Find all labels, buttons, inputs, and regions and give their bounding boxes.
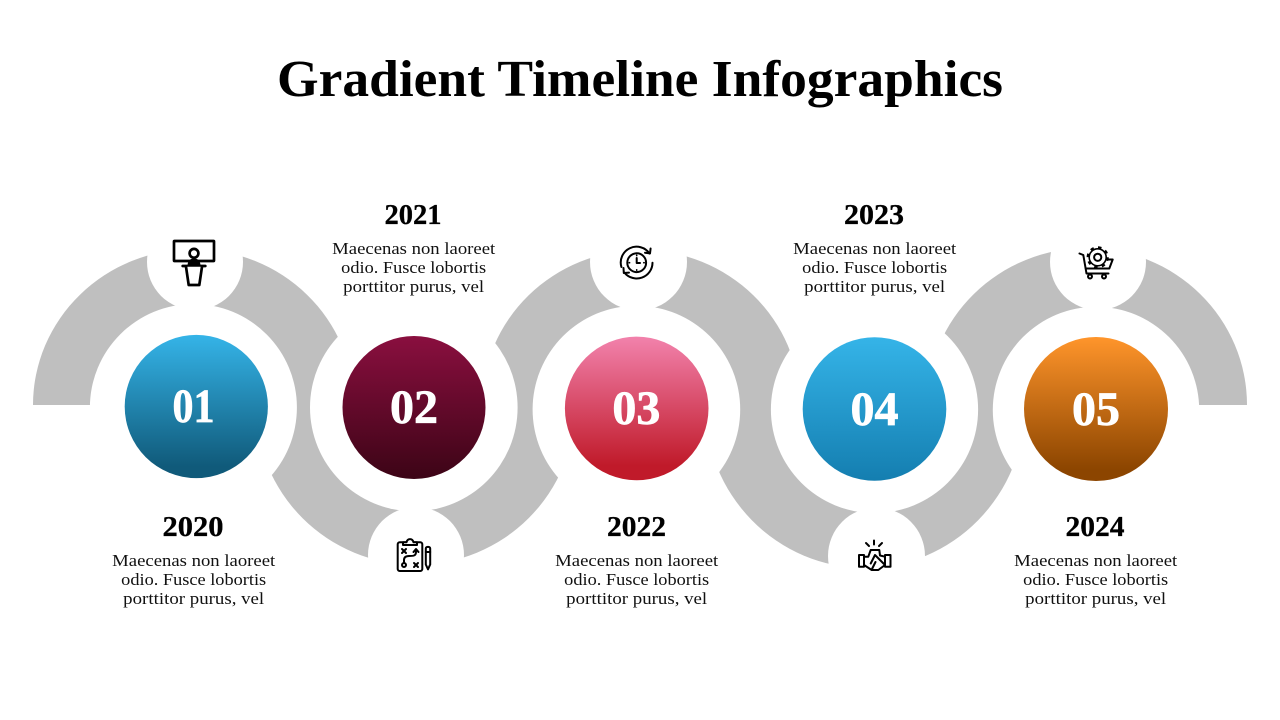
number 03: 03 — [612, 382, 660, 435]
year 2023: 2023 — [844, 199, 904, 231]
number 01: 01 — [172, 380, 214, 433]
disc 05 — [1024, 337, 1168, 481]
arc: segment 5 upper — [927, 248, 1247, 405]
step 2020 — [112, 241, 276, 608]
description 2021: odio. Fusce lobortis — [341, 258, 486, 277]
disc 04 — [803, 337, 946, 481]
arc: segment 4 lower — [705, 405, 1025, 568]
disc 01 — [125, 335, 268, 478]
step 2023 — [793, 199, 957, 570]
step 2024 — [1014, 247, 1178, 608]
description 2021: Maecenas non laoreet — [332, 239, 496, 258]
description 2024: Maecenas non laoreet — [1014, 551, 1178, 570]
description 2024: odio. Fusce lobortis — [1023, 570, 1168, 589]
description 2024 — [1014, 551, 1178, 608]
year 2021: 2021 — [384, 199, 442, 231]
description 2020: odio. Fusce lobortis — [121, 570, 266, 589]
icon: speaker at podium — [174, 241, 214, 285]
year 2020: 2020 — [162, 511, 224, 543]
description 2023: porttitor purus, vel — [804, 277, 946, 296]
step 2021 — [332, 199, 496, 571]
disc 03 — [565, 337, 708, 480]
description 2022 — [555, 551, 719, 608]
description 2022: odio. Fusce lobortis — [564, 570, 709, 589]
icon: handshake — [859, 540, 890, 570]
description 2020: Maecenas non laoreet — [112, 551, 276, 570]
description 2023: odio. Fusce lobortis — [802, 258, 947, 277]
step 2022 — [555, 247, 719, 608]
description 2020 — [112, 551, 276, 608]
description 2022: Maecenas non laoreet — [555, 551, 719, 570]
icon: strategy clipboard and pencil — [398, 539, 430, 571]
description 2021 — [332, 239, 496, 296]
year 2022: 2022 — [607, 511, 666, 543]
description 2022: porttitor purus, vel — [566, 589, 708, 608]
arc: segment 1 upper — [33, 249, 354, 405]
description 2024: porttitor purus, vel — [1025, 589, 1167, 608]
title: Gradient Timeline Infographics — [277, 51, 1003, 108]
disc 02 — [342, 336, 486, 479]
number 05: 05 — [1072, 383, 1120, 436]
description 2020: porttitor purus, vel — [123, 589, 265, 608]
arc: segment 2 lower — [256, 405, 576, 565]
number 02: 02 — [390, 381, 438, 434]
description 2023: Maecenas non laoreet — [793, 239, 957, 258]
description 2023 — [793, 239, 957, 296]
white cut-outs around discs and icons — [90, 214, 1199, 604]
number 04: 04 — [850, 383, 898, 436]
description 2021: porttitor purus, vel — [343, 277, 485, 296]
icon: cart with gear — [1080, 247, 1113, 278]
year 2024: 2024 — [1066, 511, 1124, 543]
icon: clock with circular arrows — [621, 247, 652, 278]
arc: segment 3 upper — [482, 250, 800, 405]
